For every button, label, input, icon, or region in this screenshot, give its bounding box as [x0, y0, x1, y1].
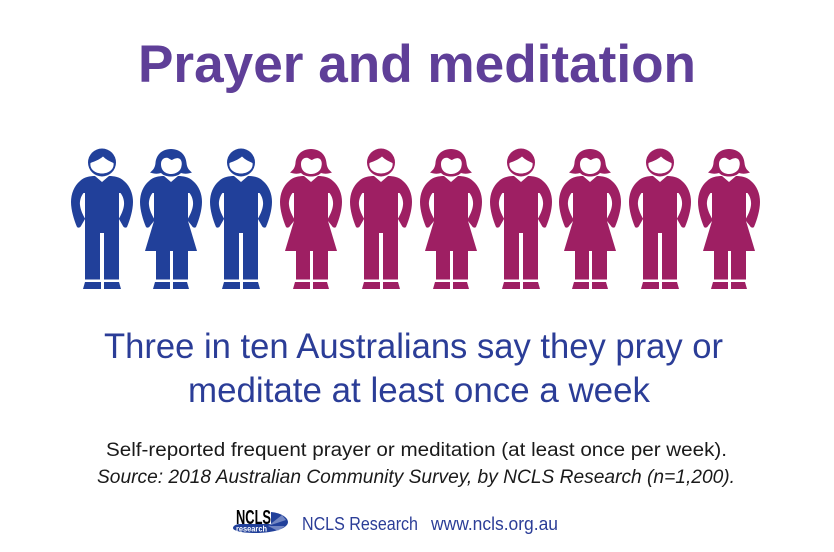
headline statement	[104, 327, 723, 410]
person 9: man, magenta	[629, 148, 691, 289]
person 7: man, magenta	[490, 148, 552, 289]
source note: Self-reported frequent prayer or meditation (at least once per week).	[106, 440, 727, 461]
person 1: man, blue	[71, 148, 133, 289]
logo: NCLS research: research	[236, 524, 267, 534]
person 6: woman, magenta	[420, 149, 482, 289]
footer: organisation and website: NCLS Research	[302, 514, 418, 534]
headline statement: meditate at least once a week	[188, 371, 650, 410]
title: Prayer and meditation	[138, 35, 696, 94]
footer: organisation and website	[302, 514, 558, 534]
person 4: woman, magenta	[280, 149, 342, 289]
pictogram: three in ten people	[71, 148, 760, 289]
source note	[97, 440, 735, 488]
logo: NCLS research: NCLS	[236, 507, 271, 529]
headline statement: Three in ten Australians say they pray or	[104, 327, 723, 366]
person 2: woman, blue	[140, 149, 202, 289]
person 5: man, magenta	[350, 148, 412, 289]
person 8: woman, magenta	[559, 149, 621, 289]
person 3: man, blue	[210, 148, 272, 289]
source note: Source: 2018 Australian Community Survey, by NCLS Research (n=1,200).	[97, 467, 735, 488]
person 10: woman, magenta	[698, 149, 760, 289]
footer: organisation and website: www.ncls.org.au	[430, 514, 558, 534]
